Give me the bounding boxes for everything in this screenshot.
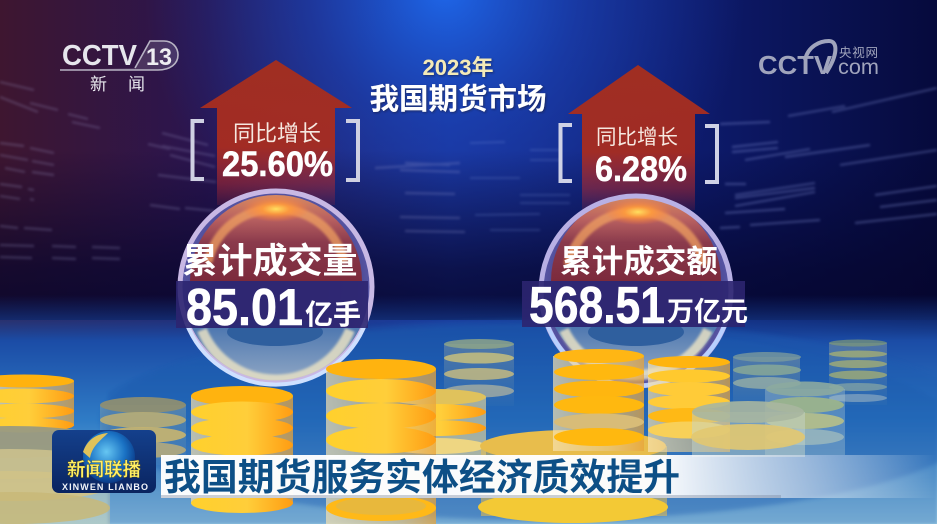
stat: cumulative value: 万亿元 [667,297,748,327]
arrow left [200,60,352,205]
coin stack: gold right short [648,356,730,452]
stat: cumulative volume: 亿手 [305,299,361,330]
CCTV-13 news logo: 新 [90,75,107,94]
growth label left: 同比增长 [233,121,321,146]
coin: large front coin bottom [478,491,668,523]
stat: cumulative volume [176,242,368,337]
CCTV.com logo: CCTV [758,50,833,80]
CCTV.com logo: com [838,56,879,79]
title year: 2023年 [423,55,493,80]
coin stack: large translucent left [0,426,110,524]
coin stack: front translucent gold [691,401,805,457]
coin stack: center rear translucent [444,339,514,406]
stat: cumulative volume: 累计成交量 [182,242,358,281]
data streaks left [0,82,465,259]
coin stack: tall gold center [326,359,436,524]
Xinwen Lianbo badge: 新闻联播 [67,459,141,480]
coin stack: rear blue translucent [733,352,801,415]
CCTV-13 news logo [60,40,178,94]
CCTV.com logo: 央视网 [839,45,878,60]
coin stack: front translucent right [765,382,845,455]
coin stack: center gold behind [386,389,486,457]
headline banner [161,455,937,498]
CCTV-13 news logo: 闻 [128,75,145,94]
growth label left [192,121,358,184]
light streaks right [720,88,937,228]
coin stack: far left gold [0,374,74,432]
coin stack: far right translucent [829,340,887,405]
growth label right: 同比增长 [596,126,678,149]
coin stack: gold left front [191,386,293,513]
arrow right [568,65,710,210]
stat: cumulative value: 累计成交额 [560,243,718,279]
coin stack: left rear translucent [100,397,186,465]
CCTV-13 news logo: CCTV [62,40,138,72]
stat: cumulative volume: 85.01 [186,279,303,337]
stat: cumulative value [522,243,748,335]
title: 我国期货市场 [369,83,547,116]
floor swoosh [108,325,937,524]
lens: trading volume [178,189,374,385]
coin: large front coin top [480,430,667,516]
headline banner: 我国期货服务实体经济质效提升 [164,457,680,498]
growth label left: 25.60% [222,145,333,184]
growth label right: 6.28% [595,150,687,189]
stat: cumulative value: 568.51 [529,277,665,335]
title [369,55,547,116]
data streaks center right [470,142,570,230]
coin stack: gold right tall [553,349,644,451]
growth label right [560,125,717,189]
Xinwen Lianbo badge: XINWEN LIANBO [62,482,148,492]
CCTV.com logo [758,41,879,80]
lens: trading value [539,194,733,388]
CCTV-13 news logo: 13 [146,44,172,71]
Xinwen Lianbo badge [52,430,156,493]
